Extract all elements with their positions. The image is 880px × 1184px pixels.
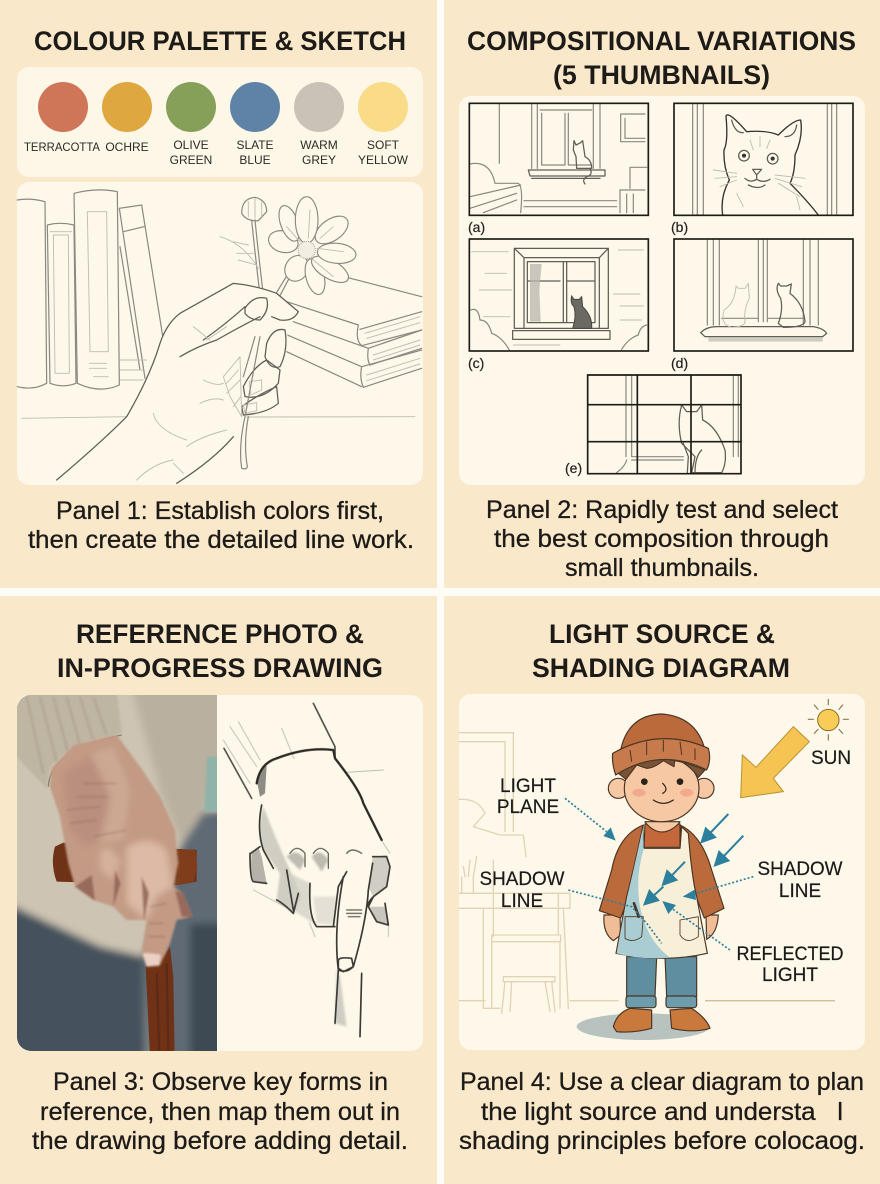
cardigan ribbed sleeve xyxy=(13,690,122,788)
swatch: terracotta: TERRACOTTA xyxy=(24,140,100,154)
panel 3 caption: Panel 3: Observe key forms in xyxy=(53,1068,388,1096)
label: shadow line right: SHADOW xyxy=(758,859,843,880)
panel 3: reference photo and drawing xyxy=(0,596,437,1184)
swatch: ochre xyxy=(102,82,152,154)
thumbnail a: room with window xyxy=(469,103,648,215)
thumbnails card xyxy=(459,96,865,485)
background room line art xyxy=(459,733,835,1013)
label: shadow line left: LINE xyxy=(501,891,543,912)
label: shadow line right: LINE xyxy=(779,881,821,902)
thumbnail d: two cats on sill xyxy=(674,239,853,351)
panel 2 title: COMPOSITIONAL VARIATIONS xyxy=(467,26,856,56)
swatch: slate blue: BLUE xyxy=(239,153,271,167)
swatch: olive green: GREEN xyxy=(170,153,212,167)
sketch: stacked books xyxy=(283,277,422,387)
panel 1: colour palette and sketch xyxy=(0,0,437,588)
cane handle xyxy=(53,843,197,885)
light direction arrows xyxy=(653,814,743,897)
panel 2 caption: small thumbnails. xyxy=(565,554,759,582)
swatch: olive green: OLIVE xyxy=(173,138,209,152)
thumbnail labels: (c) xyxy=(468,355,484,371)
thumbnail labels: (b) xyxy=(671,219,688,235)
swatch: olive green xyxy=(166,82,216,167)
thumbnail labels: (d) xyxy=(671,355,688,371)
label: reflected light: REFLECTED xyxy=(736,944,844,965)
panel 3 caption: the drawing before adding detail. xyxy=(32,1127,408,1155)
cardigan teal gap xyxy=(204,757,220,812)
label: light plane xyxy=(497,776,559,818)
panel 2 caption xyxy=(486,496,838,582)
panel 4 caption xyxy=(459,1068,865,1155)
panel 1 title: COLOUR PALETTE & SKETCH xyxy=(34,26,406,56)
swatch: warm grey: GREY xyxy=(302,153,336,167)
panel 1 caption xyxy=(28,497,414,554)
label: shadow line left xyxy=(480,869,565,912)
swatch: soft yellow: YELLOW xyxy=(358,153,409,167)
in-progress hand drawing xyxy=(223,703,390,1037)
hand shading tones xyxy=(260,807,347,1027)
panel 3 title: IN-PROGRESS DRAWING xyxy=(57,653,383,683)
drawing card background xyxy=(17,695,423,1051)
swatch: soft yellow xyxy=(358,82,409,167)
thumbnail labels: (e) xyxy=(565,460,582,476)
dotted leader lines xyxy=(565,798,753,950)
panel 2: compositional variations xyxy=(444,0,880,588)
sketch: flower with stems xyxy=(220,197,357,305)
label: shadow line right xyxy=(758,859,843,902)
line sketch card: hand holding flower xyxy=(17,182,423,485)
swatch: soft yellow: SOFT xyxy=(367,138,400,152)
panel 2 caption: Panel 2: Rapidly test and select xyxy=(486,496,838,524)
sketch: hand xyxy=(57,283,298,483)
thumbnail c: window with dark cat xyxy=(469,239,648,351)
swatch: warm grey xyxy=(294,82,344,167)
swatch: slate blue: SLATE xyxy=(236,138,274,152)
sketch: books on shelf xyxy=(17,190,163,389)
panel 4 title: LIGHT SOURCE & xyxy=(549,619,775,649)
panel 4 caption: shading principles before colocaog. xyxy=(459,1127,865,1155)
panel 2 title xyxy=(467,26,856,90)
swatch: slate blue xyxy=(230,82,280,167)
reference photo: elderly hand on cane xyxy=(17,695,217,1051)
cane shaft xyxy=(146,947,175,1057)
thumbnail labels: (a) xyxy=(468,219,485,235)
panel 2 title: (5 THUMBNAILS) xyxy=(553,60,770,90)
colour palette card xyxy=(17,67,423,177)
label: light plane: PLANE xyxy=(497,797,559,818)
swatch: terracotta xyxy=(24,82,100,154)
panel 3 title xyxy=(57,619,383,683)
panel 1 caption: then create the detailed line work. xyxy=(28,526,414,554)
thumbnail e: cat with grid overlay xyxy=(588,375,741,474)
label: sun: SUN xyxy=(811,748,851,769)
thumbnail b: cat close-up xyxy=(674,103,853,215)
panel 3 caption xyxy=(32,1068,408,1155)
panel 4 caption: Panel 4: Use a clear diagram to plan xyxy=(460,1068,864,1096)
cuff shadow line xyxy=(48,735,122,787)
thumbnail labels xyxy=(468,219,688,476)
character: boy in apron xyxy=(577,714,724,1040)
label: light plane: LIGHT xyxy=(500,776,556,797)
swatch: warm grey: WARM xyxy=(300,138,338,152)
panel 4 title: SHADING DIAGRAM xyxy=(532,653,790,683)
sun icon xyxy=(808,699,848,740)
panel 3 caption: reference, then map them out in xyxy=(40,1098,400,1126)
sketch: shelf line xyxy=(22,417,415,418)
panel 4 title xyxy=(532,619,790,683)
label: reflected light xyxy=(736,944,844,986)
panel 4: light source and shading diagram xyxy=(444,596,880,1184)
icon: big yellow light arrow xyxy=(741,727,809,798)
sweater tones xyxy=(17,812,213,962)
panel 2 caption: the best composition through xyxy=(494,525,829,553)
swatch: ochre: OCHRE xyxy=(105,140,149,154)
label: reflected light: LIGHT xyxy=(762,965,818,986)
panel 4 caption: the light source and understa l xyxy=(481,1098,843,1126)
label: shadow line left: SHADOW xyxy=(480,869,565,890)
diagram card xyxy=(459,694,865,1050)
panel 3 title: REFERENCE PHOTO & xyxy=(76,619,364,649)
hand xyxy=(50,735,193,967)
panel 1 caption: Panel 1: Establish colors first, xyxy=(56,497,384,525)
